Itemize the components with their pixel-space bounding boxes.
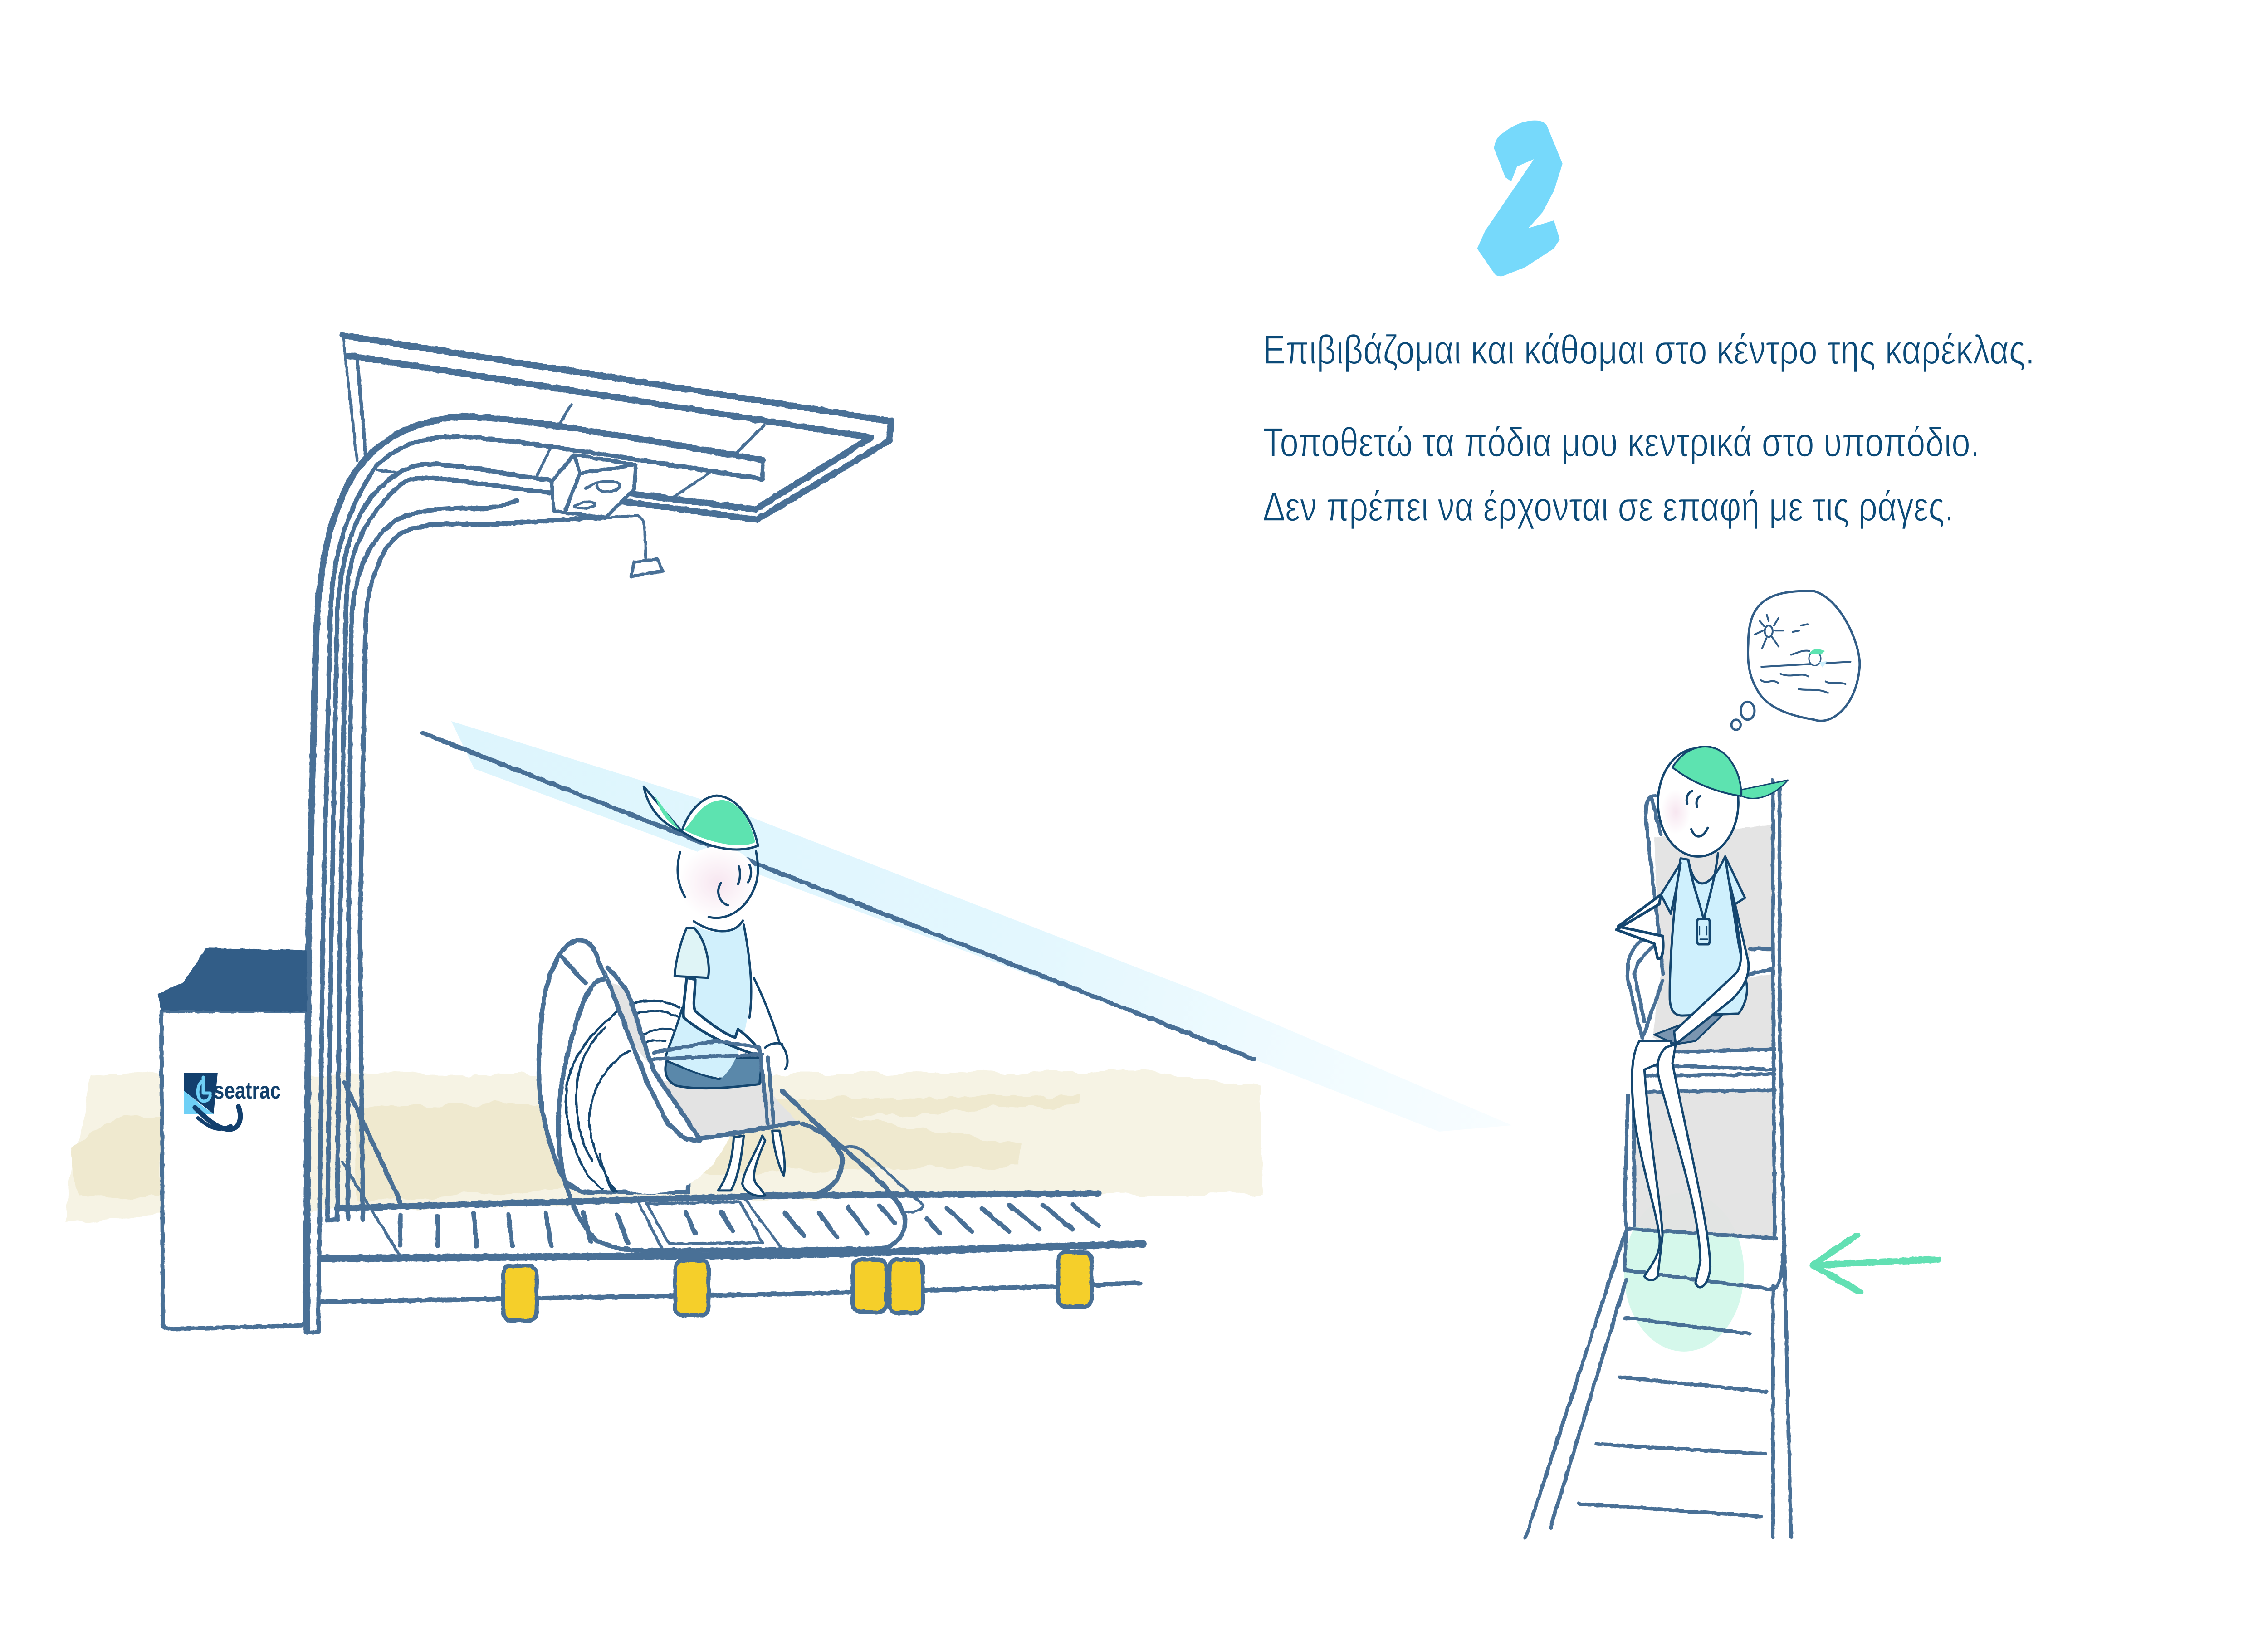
sloped rail (423, 733, 1254, 1059)
control pendant (606, 516, 663, 576)
water band (451, 721, 1512, 1132)
right scene: front view of seated person (1526, 591, 1938, 1538)
person front view (1616, 747, 1788, 1287)
t-shirt (665, 924, 750, 1078)
drive wheel (565, 1001, 737, 1194)
text: boarding sentence: Επιβιβάζομαι και κάθομαι στο κέντρο της καρέκλας. (1263, 327, 2035, 372)
cap (1672, 747, 1741, 796)
instruction text (1263, 327, 2035, 529)
armrest over person (651, 1041, 774, 1124)
lanyard and remote (1688, 853, 1718, 944)
chair side view (539, 940, 924, 1250)
shorts (1654, 1016, 1722, 1044)
seated person side view (644, 786, 787, 1196)
t-shirt (1670, 856, 1747, 1016)
cap brim (644, 786, 682, 831)
text: rails warning sentence: Δεν πρέπει να έρχονται σε επαφή με τις ράγες. (1263, 484, 1954, 529)
text: feet placement sentence: Τοποθετώ τα πόδια μου κεντρικά στο υποπόδιο. (1263, 420, 1980, 465)
step number 2 (1477, 121, 1563, 276)
sleeve (675, 928, 709, 978)
carriage bracket (551, 455, 636, 518)
seatrac logo: seatrac (214, 1077, 281, 1104)
green highlight on footrest (1624, 1192, 1744, 1352)
sun icon (1755, 615, 1783, 649)
green arrow (1813, 1235, 1938, 1292)
overhead frame and column rails (307, 335, 891, 1332)
cap (682, 796, 758, 850)
column support lines (342, 1082, 401, 1256)
track (322, 1193, 1144, 1303)
far leg and knee (754, 978, 787, 1069)
yellow wheels (503, 1252, 1092, 1321)
legs (1632, 1041, 1674, 1280)
head (678, 846, 758, 919)
arm (684, 978, 760, 1056)
cabinet body (161, 1011, 307, 1329)
head (1658, 748, 1738, 856)
chair and track front view (1526, 780, 1791, 1538)
shorts (665, 1058, 763, 1089)
seatrac logo (184, 1073, 281, 1129)
grey seat panels (1633, 825, 1774, 1238)
thought bubble (1731, 591, 1860, 730)
sea and swimmer (1761, 624, 1850, 693)
lower legs (718, 1136, 744, 1191)
sand background (64, 1073, 1263, 1222)
left scene: side view of seatrac (158, 335, 1254, 1332)
arms (1674, 901, 1749, 1044)
base cabinet (158, 948, 307, 1329)
chair frame (558, 958, 905, 1250)
chair back and seat (604, 971, 798, 1138)
chair outer shell (539, 940, 688, 1192)
cabinet lid (158, 948, 307, 1012)
